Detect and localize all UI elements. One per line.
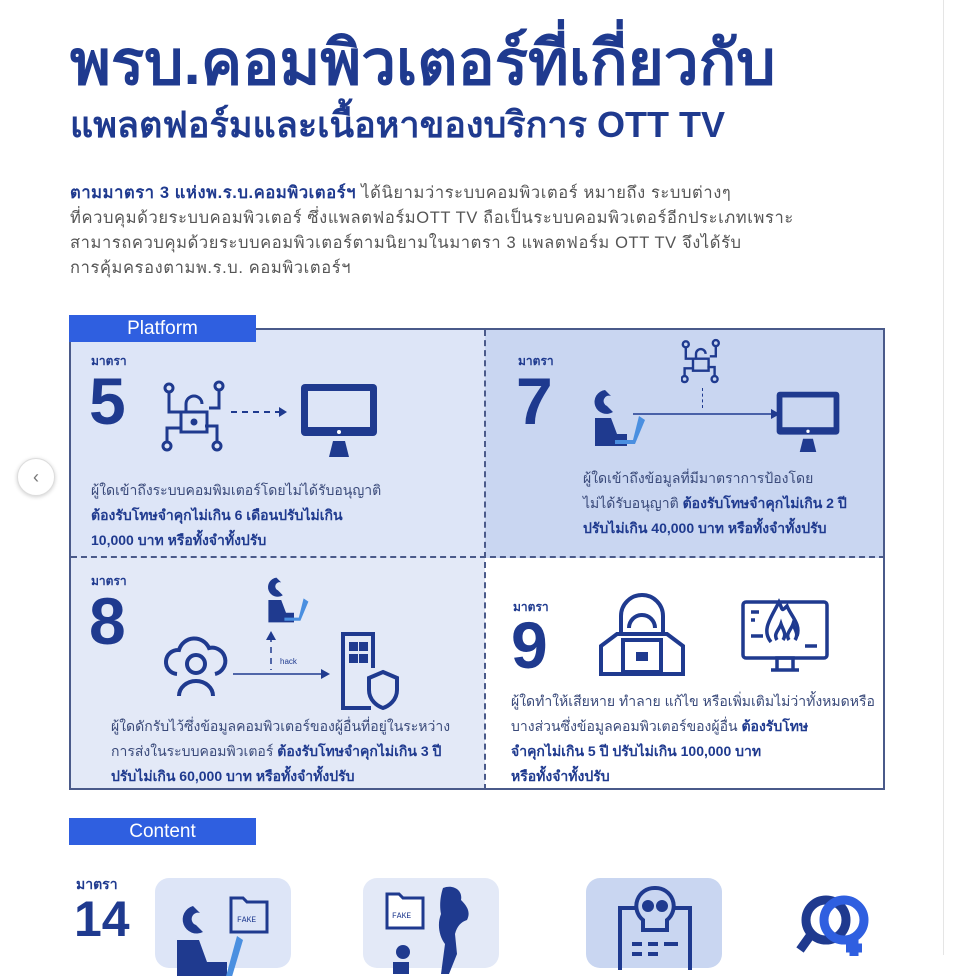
article 9: ผู้ใดทำให้เสียหาย ทำลาย แก้ไข หรือเพิ่มเติมไม่ว่าทั้งหมดหรือ xyxy=(511,693,875,709)
article 8: มาตรา xyxy=(91,574,127,588)
article 9 xyxy=(511,593,875,784)
article 8: การส่งในระบบคอมพิวเตอร์ ต้องรับโทษจำคุกไม่เกิน 3 ปี xyxy=(111,743,441,759)
tab: content xyxy=(69,818,256,845)
icon: monitor xyxy=(301,384,377,457)
intro paragraph: สามารถควบคุมด้วยระบบคอมพิวเตอร์ตามนิยามในมาตรา 3 แพลตฟอร์ม OTT TV จึงได้รับ xyxy=(70,234,742,252)
intro paragraph: ที่ควบคุมด้วยระบบคอมพิวเตอร์ ซึ่งแพลตฟอร์มOTT TV ถือเป็นระบบคอมพิวเตอร์อีกประเภทเพราะ xyxy=(70,209,794,227)
icon: cloud user xyxy=(164,636,228,696)
icon card: fake map xyxy=(363,878,499,968)
article 7: ปรับไม่เกิน 40,000 บาท หรือทั้งจำทั้งปรับ xyxy=(583,520,827,536)
article 5 xyxy=(89,354,381,548)
content section xyxy=(74,876,868,976)
article 7: ไม่ได้รับอนุญาติ ต้องรับโทษจำคุกไม่เกิน 2 ปี xyxy=(583,495,847,511)
article 5: มาตรา xyxy=(91,354,127,368)
icon: burning computer xyxy=(741,598,829,672)
content section: มาตรา xyxy=(76,876,118,892)
icon: monitor xyxy=(776,392,840,452)
icon: building shield xyxy=(341,632,399,710)
article 5: ผู้ใดเข้าถึงระบบคอมพิมเตอร์โดยไม่ได้รับอนุญาติ xyxy=(91,482,381,498)
carousel button xyxy=(17,458,55,496)
article 7: มาตรา xyxy=(518,354,554,368)
content section: 14 xyxy=(74,891,130,947)
article 9: หรือทั้งจำทั้งปรับ xyxy=(511,768,610,784)
article 8: 8 xyxy=(89,584,126,658)
icon: lock circuit xyxy=(162,380,224,452)
panel: platform xyxy=(69,328,885,790)
intro paragraph: การคุ้มครองตามพ.ร.บ. คอมพิวเตอร์ฯ xyxy=(70,259,351,277)
article 5: 10,000 บาท หรือทั้งจำทั้งปรับ xyxy=(91,532,266,548)
article 8: hack xyxy=(280,657,298,666)
icon: person at laptop xyxy=(594,390,645,446)
tab: platform xyxy=(69,315,256,342)
icon card: fake news person: FAKE xyxy=(237,916,256,925)
article 7: ผู้ใดเข้าถึงข้อมูลที่มีมาตราการป้องโดย xyxy=(583,470,813,486)
icon: hacker person xyxy=(268,578,308,622)
article 7: 7 xyxy=(516,364,553,438)
icon: gender symbols xyxy=(796,896,868,956)
article 5: 5 xyxy=(89,364,126,438)
icon card: fake news person xyxy=(155,878,291,968)
icon: hacker xyxy=(599,593,685,676)
subtitle: แพลตฟอร์มและเนื้อหาของบริการ OTT TV xyxy=(70,104,725,145)
intro paragraph xyxy=(70,183,794,278)
title: พรบ.คอมพิวเตอร์ที่เกี่ยวกับ xyxy=(70,29,776,98)
article 9: มาตรา xyxy=(513,600,549,614)
icon card: fake map: FAKE xyxy=(392,912,411,921)
article 8 xyxy=(89,574,450,784)
article 9: 9 xyxy=(511,608,548,682)
intro paragraph: ตามมาตรา 3 แห่งพ.ร.บ.คอมพิวเตอร์ฯ ได้นิยามว่าระบบคอมพิวเตอร์ หมายถึง ระบบต่างๆ xyxy=(70,184,731,202)
article 9: บางส่วนซึ่งข้อมูลคอมพิวเตอร์ของผู้อื่น ต้องรับโทษ xyxy=(511,718,808,734)
article 8: ผู้ใดดักรับไว้ซึ่งข้อมูลคอมพิวเตอร์ของผู้อื่นที่อยู่ในระหว่าง xyxy=(111,718,450,734)
article 8: ปรับไม่เกิน 60,000 บาท หรือทั้งจำทั้งปรับ xyxy=(111,768,355,784)
tab: platform: Platform xyxy=(127,318,198,339)
icon: lock circuit small xyxy=(681,338,720,384)
article 5: ต้องรับโทษจำคุกไม่เกิน 6 เดือนปรับไม่เกิน xyxy=(91,507,343,523)
arrow dashed xyxy=(231,407,287,417)
icon card: skull laptop xyxy=(586,878,722,968)
carousel button: ‹ xyxy=(33,467,39,487)
tab: content: Content xyxy=(129,821,196,842)
article 7 xyxy=(516,338,847,536)
article 9: จำคุกไม่เกิน 5 ปี ปรับไม่เกิน 100,000 บาท xyxy=(511,743,761,759)
